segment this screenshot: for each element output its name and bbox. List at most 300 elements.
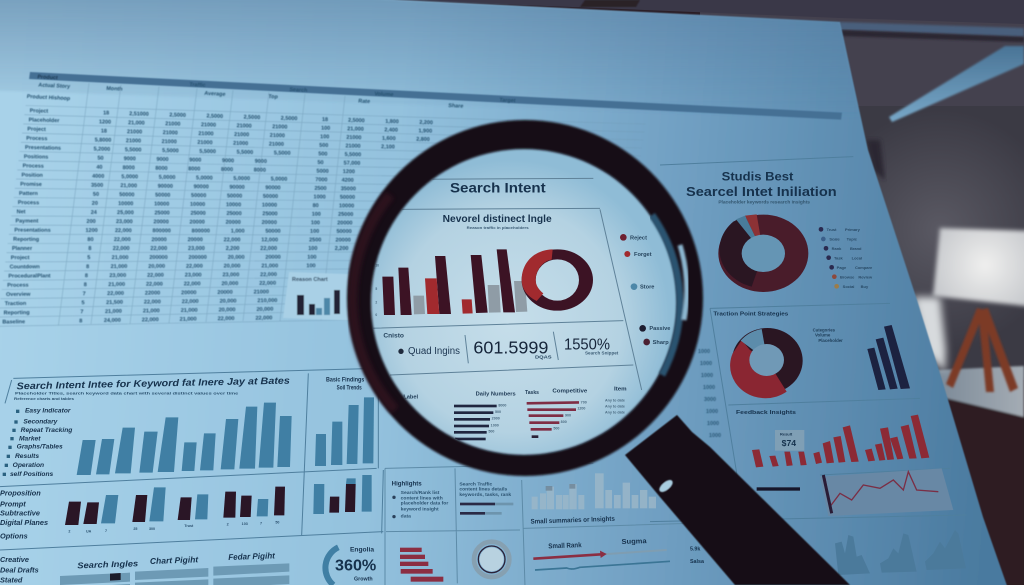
- handle metal glint: [657, 478, 675, 494]
- lens list values: 700: [581, 400, 587, 404]
- table rows: Placeholder: [29, 117, 60, 124]
- axis labels: 25: [133, 527, 137, 531]
- gauge caption: Growth: [354, 576, 373, 582]
- red slider: [533, 550, 667, 559]
- table rows: 23,000 22,000 23,000 23,000 22,000: [109, 272, 277, 279]
- lens stat unit: DQAS: [535, 355, 552, 360]
- table rows: 100: [308, 246, 317, 252]
- table rows: 2500: [309, 237, 321, 243]
- gauge value: 360%: [335, 558, 377, 575]
- table rows: 2,5000 1,800 2,200: [348, 118, 433, 126]
- table rows: 18: [322, 117, 328, 123]
- row one legend: Repeat Tracking: [21, 427, 72, 434]
- dark and blue bar chart: [65, 487, 285, 525]
- row one legend: Market: [19, 435, 41, 442]
- table rows: 5,2000: [94, 146, 110, 153]
- table rows: Baseline: [2, 319, 25, 325]
- donut two legend: Categories: [813, 327, 836, 332]
- table rows: 8: [79, 318, 82, 324]
- table header: [26, 72, 842, 120]
- table rows: 35000: [341, 186, 356, 192]
- lens small caption: Reason traffic in placeholders: [467, 225, 530, 230]
- red bar chart: [752, 415, 929, 467]
- numeric column right of lens: 1000: [706, 409, 718, 415]
- table rows: 1200: [86, 228, 98, 234]
- table rows: 57,000: [344, 160, 360, 167]
- bottom values: [690, 547, 704, 565]
- panel outlines: [650, 157, 967, 522]
- bottom table cells: [60, 563, 289, 585]
- row one legend: self Positions: [10, 471, 54, 478]
- lens legend: Forget: [634, 252, 652, 258]
- lens list values: 1000: [491, 423, 499, 427]
- table rows: 100: [310, 229, 319, 235]
- table rows: 25,000 25000 25000 25000 25000: [117, 210, 278, 217]
- row one legend: Deal Drafts: [0, 565, 39, 574]
- grey chart highlights: [546, 484, 575, 491]
- blue trend line: [535, 561, 670, 570]
- table header: Average: [204, 91, 226, 98]
- donut one legend: Compare: [855, 265, 873, 270]
- table rows: Traction: [5, 301, 26, 307]
- lens stat value two: 1550%: [564, 336, 610, 353]
- highlight text: content lines with: [401, 495, 443, 501]
- right panel subtitle: Placeholder keywords research insights: [718, 199, 811, 204]
- table rows: 50: [98, 156, 104, 162]
- lens stat caption: Search Snippet: [585, 350, 619, 355]
- axis labels: 2: [68, 530, 70, 534]
- axis labels: 2: [227, 523, 229, 527]
- table rows: 1200: [99, 119, 111, 126]
- lens list headers: Competitive: [552, 389, 587, 395]
- table rows: [2, 108, 433, 325]
- grey bar chart: [532, 473, 656, 509]
- beam posts at top: [580, 0, 640, 7]
- axis labels: 7: [105, 529, 107, 533]
- circular gauge: [325, 546, 377, 585]
- panel outlines: [385, 463, 747, 585]
- table rows: ProceduralPlant: [8, 273, 51, 280]
- value chip: [775, 430, 804, 451]
- table rows: 40: [96, 165, 102, 171]
- table rows: 21,000 90000 90000 90000 90000: [120, 183, 281, 191]
- table rows: 21,000 22,000 22,000 20,000 22,000: [108, 281, 276, 288]
- table header: Actual Story: [38, 83, 70, 90]
- panel: right side charts: [650, 157, 967, 575]
- insights caption: Small summaries or Insights: [530, 516, 615, 526]
- table rows: 100: [320, 134, 329, 140]
- lens list values: 2000: [492, 417, 500, 421]
- table rows: Process: [23, 163, 44, 170]
- row one legend: Graphs/Tables: [17, 444, 63, 451]
- donut two: [730, 328, 803, 398]
- row one legend: Creative: [0, 555, 29, 564]
- lens list headers: Tasks: [525, 390, 539, 396]
- table rows: 1200: [343, 169, 355, 175]
- lamp glow on wall: [913, 297, 946, 372]
- small area charts: [835, 530, 966, 575]
- highlight text: content lines details: [459, 487, 507, 493]
- lamp shade: [933, 228, 1024, 307]
- donut one legend: Social: [843, 284, 854, 289]
- table rows: 8: [88, 246, 91, 252]
- lens list values: 1200: [577, 407, 585, 411]
- right narrow panel title: Soil Trends: [337, 385, 362, 391]
- right panel title: Studis Best: [722, 170, 793, 184]
- table header: Month: [106, 86, 123, 93]
- lens glass: [371, 149, 677, 455]
- lens list values: Any to date: [605, 410, 625, 414]
- gauge heading: Engolia: [350, 546, 374, 553]
- table rows: 18: [101, 128, 107, 135]
- bottom values: 5.9k: [690, 547, 700, 553]
- table rows: 24,000 22,000 21,000 22,000 22,000: [104, 315, 272, 324]
- numeric column right of lens: [698, 349, 721, 439]
- lens list headers: Label: [403, 395, 419, 401]
- table rows: 21,000 2,400 1,900: [347, 126, 432, 135]
- row one legend: Prompt: [0, 500, 26, 509]
- donut one: [718, 214, 808, 292]
- table header: Volume: [374, 91, 394, 98]
- magnifier handle: [625, 415, 850, 585]
- donut one legend: Browse: [840, 274, 855, 279]
- lens legend: Reject: [630, 235, 647, 241]
- lens list values: 500: [553, 427, 559, 431]
- table rows: 100: [321, 125, 330, 132]
- row one legend: Results: [15, 453, 39, 460]
- ceiling beam: [840, 22, 1024, 37]
- slider labels: Sugma: [621, 538, 647, 546]
- table rows: Project: [30, 108, 48, 115]
- donut two legend: Placeholder: [818, 338, 843, 343]
- right narrow bar chart top: [315, 397, 374, 466]
- table rows: 18: [103, 110, 109, 117]
- table rows: Reporting: [4, 310, 30, 316]
- table header: Target: [499, 98, 516, 104]
- right narrow bar chart bottom: [313, 475, 372, 514]
- red horizontal bars: [400, 548, 443, 582]
- value chip: Result: [780, 431, 793, 436]
- table header: Product Hishoop: [26, 94, 71, 102]
- table rows: 20: [92, 201, 98, 207]
- row one legend: Digital Planes: [0, 518, 48, 527]
- table rows: 4000: [92, 174, 104, 180]
- table rows: 9000 9000 9000 9000 9000: [124, 156, 267, 165]
- spreadsheet table: [0, 72, 842, 326]
- highlights heading: Highlights: [392, 480, 422, 487]
- row one legend: Subtractive: [0, 509, 40, 518]
- table rows: Process: [7, 283, 29, 289]
- table rows: Presentations: [25, 145, 61, 152]
- lens legend: [620, 234, 670, 346]
- concentric donut: [474, 542, 509, 577]
- numeric column right of lens: 1000: [700, 361, 712, 367]
- table rows: 5: [87, 255, 90, 261]
- donut two legend: [813, 327, 843, 343]
- donut one legend: Buy: [861, 284, 869, 289]
- table rows: 3500: [91, 183, 103, 189]
- table rows: 22,000 20000 20000 22,000 12,000: [114, 237, 278, 243]
- lens list values: 900: [565, 413, 571, 417]
- table rows: 500: [318, 151, 327, 158]
- ceiling light fixture: [889, 46, 1024, 122]
- table rows: 8000 8000 8000 8000 8000: [123, 165, 266, 174]
- lens left block text: Placeholder text: [402, 443, 438, 448]
- table header: Rate: [358, 99, 370, 105]
- table rows: 21,000 20,000 22,000 20,000 21,000: [111, 263, 278, 270]
- table rows: Position: [21, 173, 43, 179]
- highlight text: Search/Rank list: [401, 490, 440, 496]
- table rows: 80: [313, 203, 319, 209]
- axis labels: 300: [149, 527, 155, 531]
- numeric column right of lens: 1000: [698, 349, 710, 355]
- axis labels: UA: [86, 530, 92, 534]
- donut one legend: Page: [837, 265, 847, 270]
- panel: bottom middle summaries: [385, 463, 747, 585]
- table rows: 21000 2,100: [345, 143, 395, 150]
- lens legend: Sharp: [653, 340, 669, 346]
- small progress bars: [460, 503, 513, 515]
- bedside table: [937, 366, 1024, 585]
- bottom table headings: [77, 550, 276, 570]
- keyword panel subtitle: Placeholder Titles, search keyword data chart with several distinct values over time: [15, 391, 239, 395]
- line chart: [820, 468, 953, 516]
- axis ticks: 10: [375, 264, 379, 268]
- highlight text: [401, 481, 511, 519]
- table rows: Presentations: [14, 228, 51, 234]
- slider labels: [548, 538, 647, 550]
- right panel title second line: Searcel Intet Iniliation: [686, 185, 837, 199]
- second panel heading: Traction Point Strategies: [713, 312, 788, 318]
- table rows: 10000: [339, 203, 354, 209]
- lens donut: [522, 249, 593, 311]
- table rows: 8: [85, 273, 88, 279]
- lens list values: [488, 398, 625, 434]
- table rows: Positions: [24, 154, 48, 161]
- donut one legend: Local: [852, 255, 862, 260]
- magnifier ring: [347, 120, 703, 476]
- table rows: Overview: [6, 292, 31, 298]
- table rows: 5,5000: [345, 152, 361, 158]
- bottom values: Salsa: [690, 559, 704, 565]
- highlight text: keyword insight: [401, 507, 439, 513]
- dark progress bar: [757, 487, 800, 491]
- table rows: 100: [311, 220, 320, 226]
- table rows: 22,000 800000 800000 1,000 50000: [115, 228, 281, 235]
- donut one legend: Scale: [829, 237, 841, 242]
- table rows: 24: [91, 210, 97, 216]
- table header: Traffic: [189, 82, 206, 89]
- table rows: 21000 1,600 2,800: [346, 135, 430, 143]
- lens panel lines: [370, 178, 642, 390]
- table rows: 21,000 21000 21000 21000 21000: [128, 120, 287, 131]
- table rows: 5000: [317, 169, 329, 175]
- lens legend: Store: [640, 285, 654, 291]
- magnifier lens: [370, 149, 677, 455]
- axis ticks: 2: [375, 300, 377, 304]
- table rows: Payment: [15, 218, 38, 225]
- table rows: Net: [17, 209, 26, 215]
- table rows: Process: [26, 136, 47, 142]
- axis labels: 50: [275, 521, 279, 525]
- numeric column right of lens: 3000: [704, 397, 716, 403]
- table rows: 5,5000 5,5000 5,5000 5,5000 5,5000: [125, 147, 290, 157]
- axis labels: 7: [260, 521, 262, 525]
- dark table chip: [110, 573, 121, 581]
- small inset bar chart: [283, 272, 400, 322]
- table rows: 100: [306, 263, 316, 269]
- axis ticks: [376, 264, 379, 316]
- table rows: Project: [27, 127, 46, 133]
- sheet top shading: [0, 0, 860, 120]
- lens list headers: Item: [614, 387, 627, 393]
- table rows: 10000 10000 10000 10000 10000: [118, 201, 277, 209]
- lens list values: 500: [495, 410, 501, 414]
- table rows: 21,000 21,000 21,000 20,000 20,000: [105, 307, 273, 315]
- right narrow panel title: Basic Findings: [326, 378, 365, 384]
- row one legend: Proposition: [0, 489, 41, 498]
- lens subtitle: Nevorel distinect lngle: [443, 214, 552, 225]
- table rows: 2,200: [335, 246, 348, 252]
- highlight text: Search Traffic: [459, 481, 493, 487]
- table rows: 2500: [314, 186, 327, 192]
- blue bar chart: [77, 403, 292, 475]
- numeric column right of lens: 1000: [709, 433, 721, 439]
- axis ticks: 5: [375, 287, 377, 291]
- table rows: Reporting: [13, 237, 39, 243]
- table rows: 100: [307, 255, 316, 261]
- lens stat dot: [398, 349, 404, 354]
- lens stat label: Cnisto: [383, 333, 404, 339]
- table rows: 7: [83, 291, 86, 297]
- table header: Search: [289, 87, 308, 94]
- table rows: 200: [87, 219, 96, 225]
- keyword panel subtitle: Reference charts and tables: [14, 397, 74, 401]
- table header band: [29, 72, 842, 120]
- table rows: 25000: [338, 212, 353, 218]
- dark slanted bars: [867, 325, 910, 390]
- legend markers: [3, 410, 19, 476]
- table rows: 80: [87, 237, 94, 243]
- numeric column right of lens: 1000: [703, 385, 715, 391]
- lens list values: Any to date: [605, 398, 625, 402]
- table rows: 5: [82, 300, 85, 306]
- lens list values: 8000: [498, 404, 506, 408]
- panel outlines: [0, 367, 383, 550]
- table rows: 5,0000 5,0000 5,0000 5,0000 5,0000: [121, 174, 287, 183]
- donut two legend: Volume: [815, 333, 831, 338]
- ring bezel highlight: [652, 215, 687, 375]
- table rows: 21,500 22,000 22,000 20,000 210,000: [106, 298, 277, 306]
- bottom table headings: Search Ingles: [77, 558, 139, 570]
- lens title: Search Intent: [450, 181, 546, 196]
- donut one legend: Topic: [847, 237, 858, 242]
- highlight text: keywords, tasks, rank: [459, 492, 511, 498]
- lens bar chart: [382, 249, 527, 315]
- lens dark list bars: [454, 405, 497, 440]
- keyword panel subtitle: [14, 391, 239, 401]
- ceiling shadow line: [840, 30, 1024, 42]
- row one legend: Options: [0, 531, 28, 540]
- row one legend: Easy Indicator: [25, 408, 71, 415]
- table rows: 8: [84, 282, 87, 288]
- table rows: 22,000 22000 20000 20000 21000: [107, 289, 269, 297]
- lamp legs: [946, 308, 1018, 392]
- bottom table headings: Chart Pigiht: [150, 554, 200, 566]
- numeric column right of lens: 1000: [707, 421, 719, 427]
- table rows: 500: [319, 143, 328, 149]
- lens red list bars: [527, 401, 579, 438]
- lens stat name: Quad Ingins: [408, 346, 460, 357]
- lens left block text: [402, 443, 438, 454]
- donut one legend: Brand: [850, 246, 862, 251]
- table rows: 50: [317, 160, 324, 166]
- table rows: 23,000 20000 20000 20000 20000: [116, 219, 277, 226]
- row one legend: Stated: [0, 575, 23, 584]
- table rows: 21000 21000 21000 21000 21000: [127, 129, 285, 139]
- lens list values: 500: [488, 430, 494, 434]
- numeric column right of lens: 1000: [701, 373, 713, 379]
- axis ticks: 0: [375, 313, 377, 317]
- axis labels: 103: [242, 522, 248, 526]
- keyword panel title: Search Intent Intee for Keyword fat Inere Jay at Bates: [16, 376, 291, 392]
- table rows: 5,8000: [95, 137, 111, 144]
- lens legend: Passive: [649, 326, 670, 332]
- donut one legend: Primary: [845, 227, 861, 232]
- donut one legend: Task: [834, 255, 844, 260]
- highlight text: data: [401, 513, 411, 519]
- row one legend: [0, 408, 72, 584]
- panel: keyword bar charts: [0, 367, 383, 585]
- donut one legend: Review: [858, 274, 873, 279]
- ring maroon edge: [353, 195, 395, 410]
- inset title: Reason Chart: [292, 277, 328, 283]
- table rows: 50000 50000 50000 50000 50000: [119, 192, 278, 200]
- table rows: 21,000 200000 200000 20,000 20000: [112, 255, 281, 261]
- table rows: 4200: [342, 178, 354, 184]
- slider labels: Small Rank: [548, 542, 582, 550]
- table rows: 50: [93, 192, 99, 198]
- third panel heading: Feedback Insights: [736, 410, 796, 416]
- table rows: 50000: [340, 195, 355, 201]
- highlight text: placeholder data for: [401, 501, 448, 507]
- value chip: $74: [782, 438, 796, 448]
- table rows: 20000: [336, 237, 351, 243]
- table header: Top: [268, 94, 279, 100]
- lens list headers: [404, 386, 626, 398]
- table rows: 7000: [315, 177, 327, 183]
- table rows: 21000 21000 21000 21000 21000: [126, 138, 284, 148]
- lens list values: Any to date: [605, 404, 625, 408]
- table header: Product: [37, 74, 58, 81]
- row one legend: Secondary: [23, 419, 58, 426]
- donut one legend: Trust: [827, 227, 837, 232]
- lens list values: 800: [561, 420, 567, 424]
- highlight dots: [392, 496, 396, 518]
- bottom table headings: Fedar Pigiht: [228, 550, 276, 562]
- table rows: 50000: [336, 229, 352, 235]
- row one legend: Operation: [13, 462, 44, 469]
- table rows: 22,000 22,000 23,000 2,200 22,000: [113, 246, 277, 252]
- axis labels: [68, 521, 279, 534]
- table rows: 8: [86, 264, 89, 270]
- table rows: 1000: [314, 194, 326, 200]
- lens left block text: row detail: [402, 449, 423, 454]
- table rows: 2,51000 2,5000 2,5000 2,5000 2,5000: [129, 111, 297, 122]
- donut one legend: Rank: [832, 246, 842, 251]
- table rows: 100: [312, 212, 321, 218]
- lens stat value one: 601.5999: [473, 337, 548, 357]
